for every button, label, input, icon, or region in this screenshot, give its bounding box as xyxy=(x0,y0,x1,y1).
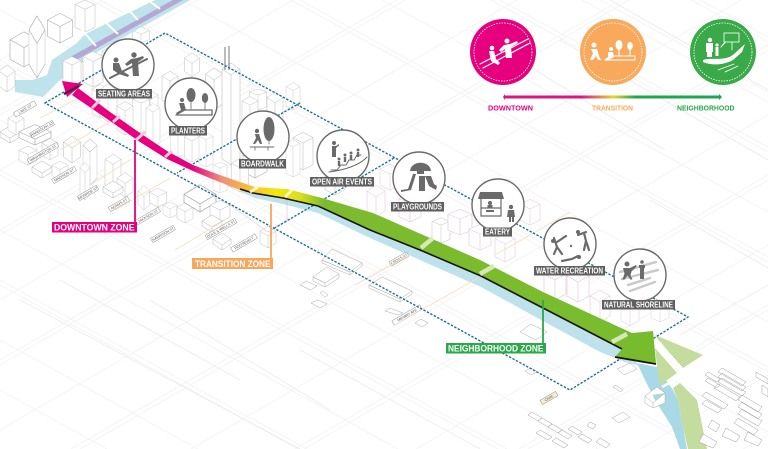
downtown and neighborhood buildings xyxy=(0,16,669,326)
icon: people exercising xyxy=(551,230,589,261)
legend label: neighborhood: NEIGHBORHOOD xyxy=(677,106,734,112)
icon: person walking beside tree xyxy=(250,117,274,150)
lower corridor slabs and small buildings xyxy=(300,249,665,423)
callout: water recreation: WATER RECREATION xyxy=(536,267,603,276)
callout: water recreation xyxy=(534,218,605,276)
street name tags: RANDOLPH ST xyxy=(30,121,55,137)
lower river and green park xyxy=(637,335,707,449)
callout: playgrounds: PLAYGROUNDS xyxy=(393,203,442,212)
legend xyxy=(470,19,756,112)
icon: food stand with customer xyxy=(478,192,515,222)
small neighborhood building clusters xyxy=(528,368,768,448)
legend circle: transition xyxy=(580,19,646,85)
street name tags: CIVIC xyxy=(544,394,555,402)
street name tags: HARRISON ST xyxy=(152,226,175,242)
legend circle: neighborhood xyxy=(690,19,756,85)
callout: boardwalk: BOARDWALK xyxy=(241,160,284,169)
callout: planters xyxy=(165,78,217,136)
street name tags: MADISON ST xyxy=(53,168,76,183)
street name tags: CROSS ST xyxy=(390,253,409,266)
street name tags: WASHINGTON ST xyxy=(29,144,58,163)
callout: seating areas xyxy=(96,39,154,99)
legend arrow xyxy=(503,94,722,100)
cross street accents xyxy=(40,100,570,325)
zone label: downtown xyxy=(52,140,137,233)
callout: open air events: OPEN AIR EVENTS xyxy=(312,178,372,187)
zone ribbon arrow xyxy=(62,81,656,364)
legend label: downtown: DOWNTOWN xyxy=(488,106,533,112)
street name tags: LAKE ST xyxy=(18,103,33,115)
legend circle: downtown xyxy=(470,19,536,85)
icon: people on shore with reeds xyxy=(620,260,658,291)
river channel beside the ribbon xyxy=(195,172,640,366)
callout: seating areas: SEATING AREAS xyxy=(98,90,150,99)
dashed project boundary xyxy=(45,33,688,390)
callout: open air events xyxy=(310,130,374,187)
icon: play structure xyxy=(401,163,437,192)
zone label: neighborhood: NEIGHBORHOOD ZONE xyxy=(448,344,544,354)
lower city blocks xyxy=(0,113,287,250)
callout: playgrounds xyxy=(391,152,445,212)
street name tags: ROOSEVELT xyxy=(234,236,255,250)
street name tags xyxy=(13,101,558,405)
callout: natural shoreline: NATURAL SHORELINE xyxy=(604,301,673,310)
icon: speaker and audience xyxy=(329,141,367,172)
callout: planters: PLANTERS xyxy=(171,127,205,136)
callout: eatery xyxy=(472,179,524,237)
icon: people on bench xyxy=(110,52,147,78)
callout: eatery: EATERY xyxy=(485,228,511,237)
zone label: neighborhood xyxy=(446,300,546,354)
upper river channel xyxy=(15,0,190,97)
legend label: transition: TRANSITION xyxy=(592,106,633,112)
street name tags: ADAMS ST xyxy=(110,198,129,211)
icon: planter and trees xyxy=(176,88,212,115)
street name tags: JACKSON ST xyxy=(137,208,160,224)
zone label: transition xyxy=(192,204,273,269)
back row buildings xyxy=(10,0,150,67)
street name tags: MONROE ST xyxy=(78,186,99,200)
zone label: transition: TRANSITION ZONE xyxy=(195,259,270,269)
street name tags: COLE & WELLS ST xyxy=(206,219,237,239)
zone label: downtown: DOWNTOWN ZONE xyxy=(54,223,134,233)
callout: natural shoreline xyxy=(602,249,675,310)
callout: boardwalk xyxy=(237,111,289,169)
street name tags: MIDWAY AVE xyxy=(397,308,418,322)
